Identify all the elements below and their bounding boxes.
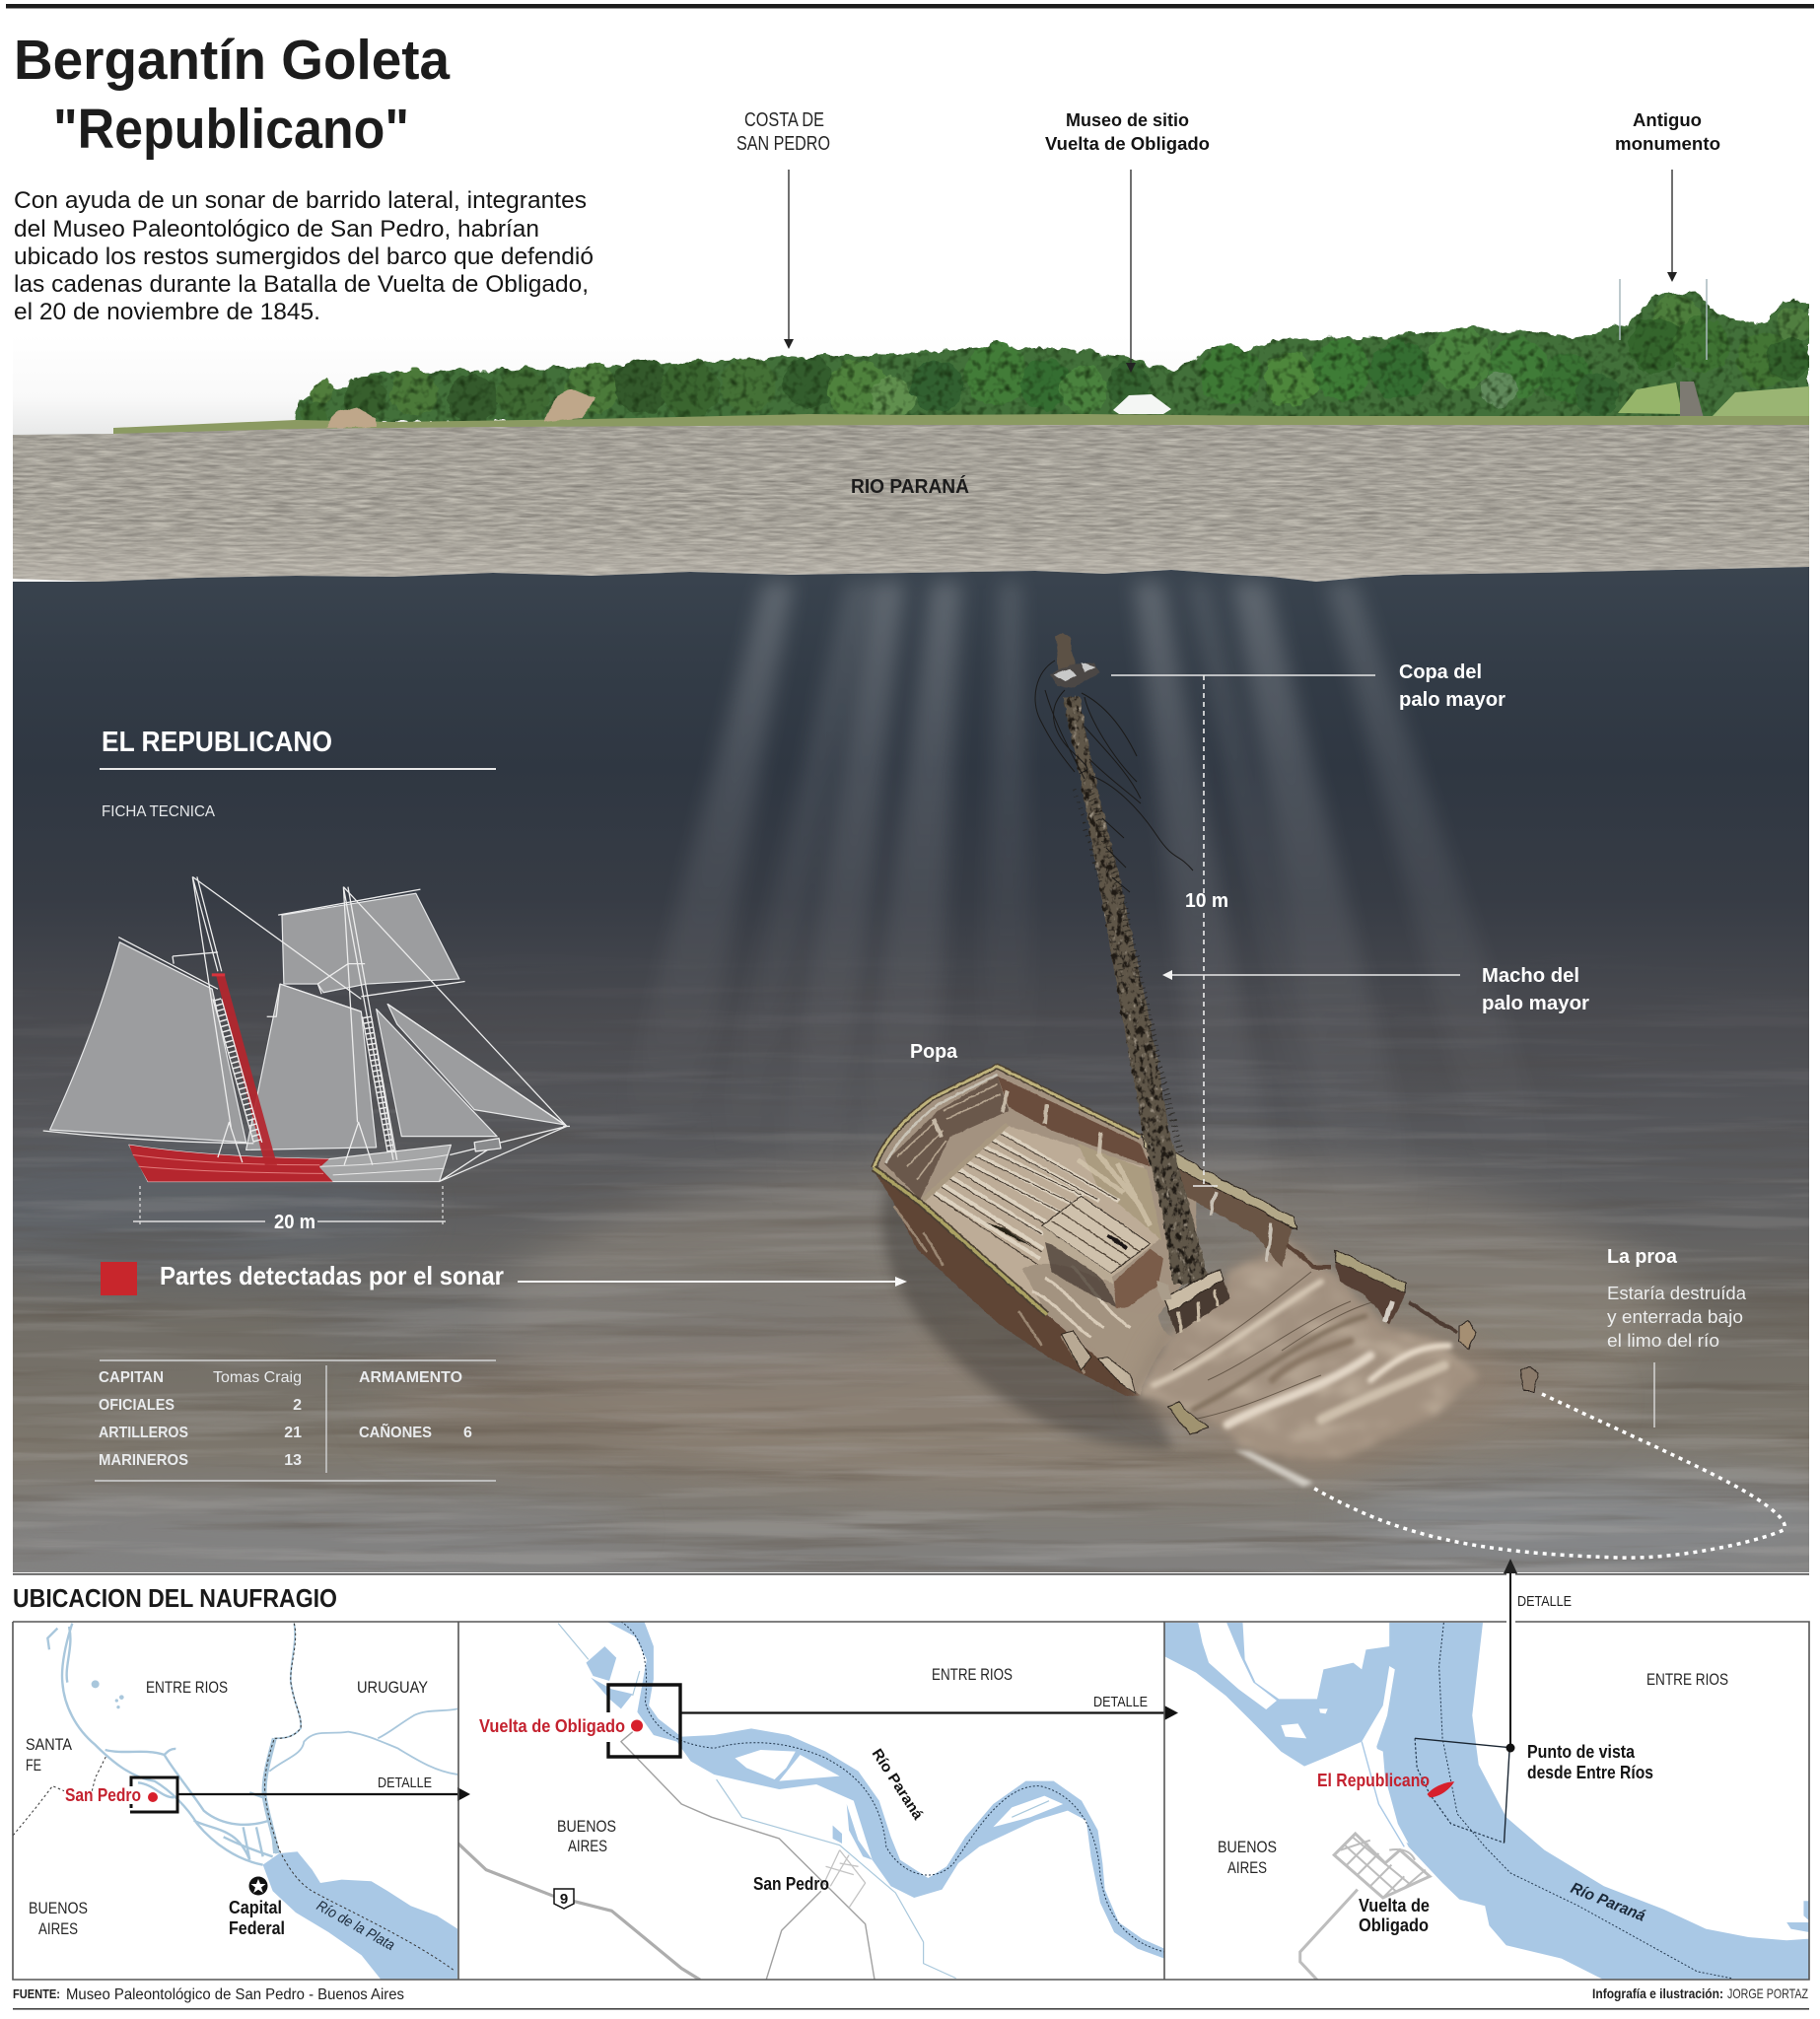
- intro text: Con ayuda de un sonar de barrido lateral, integrantes: [14, 187, 587, 214]
- mainmast: [1035, 633, 1210, 1285]
- capital federal marker: Capital: [229, 1898, 282, 1917]
- callout: museo de sitio: [1045, 110, 1210, 373]
- callout: costa de San Pedro: [736, 109, 830, 349]
- map: vuelta de obligado: Obligado: [1359, 1915, 1429, 1935]
- label: la proa: La proa: [1607, 1246, 1678, 1268]
- river: [1164, 1623, 1809, 1980]
- data table: ARMAMENTO: [359, 1369, 462, 1386]
- rio de la plata: [263, 1851, 457, 1980]
- waist mud: [1022, 1264, 1173, 1390]
- wreck marker: [1428, 1781, 1454, 1797]
- map: vuelta de obligado: Vuelta de: [1359, 1896, 1430, 1915]
- dimension: 20 m: [133, 1186, 446, 1233]
- label: copa del palo mayor: palo mayor: [1399, 689, 1505, 711]
- callout: museo de sitio: Vuelta de Obligado: [1045, 134, 1210, 154]
- label: copa del palo mayor: [1111, 661, 1505, 711]
- detail arrow: [680, 1694, 1178, 1720]
- map: san pedro: ENTRE RIOS: [932, 1665, 1013, 1684]
- data table: Tomas Craig: [213, 1369, 302, 1386]
- map: san pedro: San Pedro: [753, 1874, 829, 1894]
- parana river: [607, 1622, 1164, 1959]
- source line: Museo Paleontológico de San Pedro - Buenos Aires: [66, 1986, 404, 2003]
- detail arrow to scene: DETALLE: [1517, 1593, 1572, 1610]
- data table: 2: [293, 1397, 302, 1414]
- callout: museo de sitio: Museo de sitio: [1066, 110, 1189, 130]
- roads: [458, 1732, 875, 1980]
- legend: sonar: Partes detectadas por el sonar: [160, 1261, 504, 1290]
- river surface: [13, 419, 1809, 587]
- rigging remnants: [1035, 661, 1193, 892]
- legend: sonar: [101, 1261, 504, 1295]
- label: macho del palo mayor: Macho del: [1482, 965, 1579, 987]
- heading: ubicacion del naufragio: UBICACION DEL NAUFRAGIO: [13, 1583, 337, 1613]
- map: vuelta de obligado: Río Paraná: [1569, 1880, 1647, 1925]
- map: vuelta de obligado: AIRES: [1227, 1858, 1267, 1877]
- label: la proa: y enterrada bajo: [1607, 1307, 1743, 1327]
- starboard wall: [998, 1077, 1151, 1166]
- map: region: SANTA: [26, 1735, 73, 1754]
- vuelta de obligado marker: Vuelta de Obligado: [479, 1716, 625, 1736]
- mast step timbers: [1156, 1269, 1229, 1334]
- rocks on the shore: [327, 388, 595, 428]
- callout: antiguo monumento: [1615, 110, 1720, 282]
- map panel frames: [13, 1622, 1809, 1980]
- province and channel lines: [13, 1624, 454, 1970]
- detail arrow: DETALLE: [378, 1775, 432, 1791]
- label: la proa: el limo del río: [1607, 1331, 1719, 1351]
- rivers: [47, 1624, 457, 1865]
- label: macho del palo mayor: palo mayor: [1482, 993, 1589, 1014]
- data table: 13: [284, 1452, 302, 1469]
- subheading: ficha tecnica: FICHA TECNICA: [102, 803, 215, 820]
- detail arrow: [177, 1775, 470, 1801]
- intro text: las cadenas durante la Batalla de Vuelta de Obligado,: [14, 271, 589, 298]
- data table: 21: [284, 1425, 302, 1441]
- exposed streak: [1234, 1450, 1313, 1487]
- stern wall: [884, 1077, 1009, 1200]
- detail arrow: DETALLE: [1093, 1694, 1148, 1710]
- map: region: BUENOS: [29, 1899, 88, 1917]
- map: san pedro: BUENOS: [557, 1817, 616, 1836]
- shoreline trees: [296, 279, 1812, 430]
- ship diagram: [43, 876, 570, 1182]
- starboard rail: [1142, 1134, 1457, 1333]
- detail arrow to scene: [1504, 1559, 1572, 1748]
- gunwales: [874, 1067, 1141, 1168]
- intro text: [14, 187, 594, 325]
- museum building: [1113, 394, 1171, 414]
- callout: costa de San Pedro: SAN PEDRO: [736, 133, 830, 155]
- icon: route 9: [554, 1889, 574, 1909]
- river label: RIO PARANÁ: [851, 475, 969, 498]
- brown patch: [1114, 1249, 1163, 1308]
- dimension: 10 m: 10 m: [1185, 890, 1228, 912]
- intro text: ubicado los restos sumergidos del barco que defendió: [14, 244, 594, 270]
- arrow to wreck: [518, 1277, 907, 1287]
- san pedro marker: [65, 1777, 177, 1812]
- label: popa: Popa: [910, 1041, 958, 1063]
- data table: MARINEROS: [99, 1452, 188, 1469]
- viewpoint callout: desde Entre Ríos: [1527, 1763, 1653, 1782]
- map: vuelta de obligado: [1164, 1623, 1809, 1980]
- panel: el republicano: [43, 727, 570, 1481]
- map: region: [13, 1624, 470, 1980]
- map: region: URUGUAY: [357, 1678, 428, 1697]
- san pedro marker: San Pedro: [65, 1785, 141, 1805]
- map: san pedro: AIRES: [568, 1837, 607, 1855]
- mast head: [1055, 633, 1075, 670]
- intro text: el 20 de noviembre de 1845.: [14, 299, 320, 325]
- title: [14, 29, 451, 161]
- data table: CAPITAN: [99, 1369, 164, 1386]
- callout: antiguo monumento: monumento: [1615, 134, 1720, 154]
- source line: FUENTE:: [13, 1986, 60, 2001]
- callout: antiguo monumento: Antiguo: [1633, 110, 1702, 130]
- top rule: [6, 4, 1814, 8]
- intro text: del Museo Paleontológico de San Pedro, habrían: [14, 216, 539, 243]
- ribs: [934, 1091, 1101, 1153]
- data table: ARTILLEROS: [99, 1425, 188, 1441]
- map: vuelta de obligado: BUENOS: [1218, 1838, 1277, 1856]
- viewpoint callout: Punto de vista: [1527, 1742, 1636, 1762]
- map: region: ENTRE RIOS: [146, 1678, 228, 1697]
- icon: route 9: 9: [560, 1891, 568, 1908]
- sky: [13, 335, 1809, 439]
- callout: costa de San Pedro: COSTA DE: [744, 109, 824, 131]
- title: Bergantín Goleta: [14, 29, 451, 92]
- deck: [922, 1126, 1160, 1314]
- channel and sight lines: [1439, 1623, 1731, 1979]
- stern beam: [924, 1125, 1008, 1200]
- map: region: AIRES: [38, 1919, 78, 1938]
- credit line: Infografía e ilustración:: [1592, 1985, 1723, 2001]
- buried bow outline: [1311, 1394, 1785, 1558]
- shore reeds: [113, 414, 1809, 435]
- hatch: [1042, 1196, 1151, 1285]
- map: vuelta de obligado: El Republicano: [1317, 1771, 1430, 1790]
- mud mound: [1134, 1232, 1518, 1479]
- wreck illustration: [873, 633, 1538, 1487]
- map: san pedro: [458, 1622, 1178, 1980]
- label: la proa: Estaría destruída: [1607, 1284, 1747, 1303]
- wreck shadow: [881, 1173, 1173, 1449]
- title: "Republicano": [53, 98, 409, 161]
- road and town grid: [1300, 1834, 1430, 1980]
- heading: el republicano: EL REPUBLICANO: [102, 727, 332, 758]
- map: region: FE: [26, 1756, 41, 1775]
- underwater scene: [0, 567, 1820, 1572]
- capital federal marker: Federal: [229, 1918, 285, 1938]
- label: la proa: [1607, 1246, 1747, 1427]
- dimension: 20 m: 20 m: [274, 1212, 315, 1233]
- map: san pedro: Río Paraná: [869, 1746, 927, 1824]
- viewpoint callout: [1506, 1742, 1653, 1782]
- data table: CAÑONES: [359, 1422, 432, 1441]
- data table: OFICIALES: [99, 1397, 175, 1414]
- label: macho del palo mayor: [1162, 965, 1589, 1014]
- scene bottom rule: [13, 1573, 1809, 1575]
- label: copa del palo mayor: Copa del: [1399, 661, 1482, 683]
- map: region: Río de la Plata: [314, 1898, 397, 1954]
- capital federal marker: [229, 1877, 285, 1938]
- light rays: [616, 582, 1568, 1262]
- stern hull: [873, 1067, 1196, 1397]
- vuelta de obligado marker: [479, 1685, 680, 1757]
- port timbers: [1062, 1331, 1091, 1370]
- buried timbers: [1168, 1321, 1538, 1434]
- data table: [95, 1360, 496, 1481]
- map: vuelta de obligado: ENTRE RIOS: [1646, 1670, 1728, 1689]
- data table: 6: [463, 1425, 472, 1441]
